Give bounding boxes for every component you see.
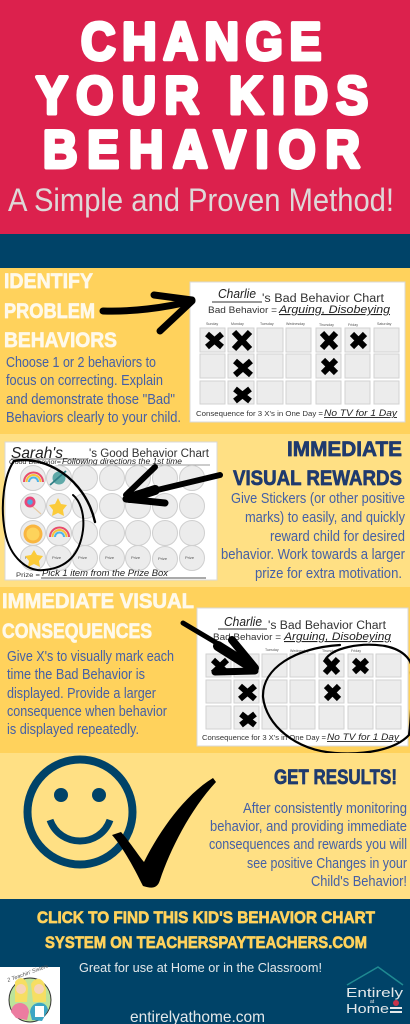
chart: Charlie's bad behavior chart: Consequence for 3 X's in One Day = [196, 409, 324, 418]
chart: Charlie's bad behavior chart: Tuesday [260, 322, 274, 326]
icon: star sticker [25, 550, 43, 567]
call to action heading: SYSTEM ON TEACHERSPAYTEACHERS.COM [45, 933, 367, 952]
navy divider band [0, 234, 410, 268]
chart: Charlie's bad behavior chart: 's Bad Behavior Chart [262, 293, 385, 305]
chart: Sarah's good behavior chart: Prize = [16, 572, 40, 579]
heading: immediate visual rewards [233, 438, 402, 490]
icon: smiley face [28, 760, 132, 864]
text block: identify description: Behaviors clearly to your child. [6, 410, 181, 426]
chart: Charlie's bad behavior chart: Wednesday [286, 322, 305, 326]
chart: Charlie's bad behavior chart, consequences: Bad Behavior = [213, 632, 281, 642]
text block: identify description: and demonstrate those "Bad" [6, 392, 175, 408]
chart: Charlie's bad behavior chart: Monday [231, 322, 244, 326]
chart: Charlie's bad behavior chart: Thursday [319, 323, 334, 327]
chart: Charlie's bad behavior chart: Sunday [206, 322, 218, 326]
chart: Charlie's bad behavior chart, consequences: No TV for 1 Day [327, 732, 400, 742]
chart: Charlie's bad behavior chart: Friday [348, 323, 358, 327]
chart: Sarah's good behavior chart [5, 442, 217, 580]
chart: Charlie's bad behavior chart: Saturday [377, 322, 392, 326]
icon: planet sticker [50, 471, 66, 485]
panel: immediate visual consequences [0, 587, 410, 753]
panel: immediate visual rewards [0, 434, 410, 587]
arrow: points to consequences [183, 623, 255, 672]
heading: immediate visual consequences [2, 590, 194, 643]
chart: Sarah's good behavior chart: Good Behavior= [9, 460, 62, 466]
chart: Charlie's bad behavior chart, consequences: Friday [351, 649, 361, 653]
chart: Sarah's good behavior chart: Prize [52, 555, 62, 560]
logo: Entirely at Home: Home [346, 1001, 389, 1016]
chart: Charlie's bad behavior chart, consequences [197, 608, 408, 746]
icon: star sticker [49, 498, 67, 516]
circle highlight around stickers [3, 460, 95, 570]
title: YOUR KIDS [36, 65, 368, 125]
heading: identify problem behaviors: PROBLEM [4, 300, 95, 323]
panel: footer [0, 899, 410, 1024]
heading: immediate visual consequences: CONSEQUENCES [2, 620, 152, 643]
chart: Sarah's good behavior chart: Prize [185, 555, 195, 560]
panel: identify problem behaviors [0, 268, 410, 434]
chart: Sarah's good behavior chart: Prize [78, 555, 88, 560]
text block: results description [209, 801, 407, 890]
chart: Sarah's good behavior chart: Prize [131, 555, 141, 560]
text block: consequences description: Give X's to visually mark each [7, 649, 174, 665]
chart: Charlie's bad behavior chart, consequences: Consequence for 3 X's in One Day = [202, 733, 327, 742]
call to action heading [37, 908, 376, 952]
text block: consequences description: is displayed repeatedly. [7, 722, 139, 738]
chart: Sarah's good behavior chart: 's Good Behavior Chart [89, 448, 210, 460]
icon: lollipop sticker [24, 496, 41, 514]
chart: Charlie's bad behavior chart: Bad Behavior = [208, 305, 277, 315]
chart: Charlie's bad behavior chart, consequences: Tuesday [265, 648, 279, 652]
heading: identify problem behaviors: IDENTIFY [4, 270, 93, 293]
text block: consequences description: time the Bad Behavior is [7, 667, 145, 683]
icon: check mark [112, 778, 216, 888]
logo: 2 Teachin' Sisters [0, 963, 60, 1024]
chart: Charlie's bad behavior chart: Arguing, Disobeying [278, 304, 391, 316]
chart: Charlie's bad behavior chart, consequences: Thursday [322, 649, 337, 653]
chart: Sarah's good behavior chart: Prize [105, 555, 115, 560]
text block: consequences description: displayed. Provide a larger [7, 686, 156, 702]
title: BEHAVIOR [43, 119, 360, 179]
text block: consequences description [7, 649, 174, 738]
chart: Charlie's bad behavior chart, consequences: Charlie [224, 615, 262, 629]
chart: Sarah's good behavior chart: Sarah's [11, 445, 63, 462]
heading: identify problem behaviors: BEHAVIORS [4, 329, 117, 352]
chart: Sarah's good behavior chart: Prize [158, 556, 168, 561]
text block: consequences description: consequence when behavior [7, 704, 167, 720]
chart: Sarah's good behavior chart: Pick 1 item from the Prize Box [42, 568, 169, 578]
logo: 2 Teachin' Sisters: 2 Teachin' Sisters [6, 963, 49, 984]
arrow: points to sticker chart [126, 467, 220, 503]
chart: Charlie's bad behavior chart, consequences: 's Bad Behavior Chart [268, 620, 387, 632]
logo: Entirely at Home: at [370, 999, 375, 1005]
chart: Charlie's bad behavior chart: Charlie [218, 287, 256, 301]
circle highlight around empty cells [263, 645, 410, 753]
text block: identify description: Choose 1 or 2 behaviors to [6, 355, 156, 371]
chart: Charlie's bad behavior chart, consequences: Wednesday [290, 649, 309, 653]
chart: Sarah's good behavior chart: Prize [25, 555, 35, 560]
arrow: points to bad behavior chart [103, 295, 192, 331]
icon: sun sticker [24, 524, 42, 544]
title: CHANGE [81, 11, 321, 71]
icon: rainbow sticker [50, 528, 69, 537]
text block: identify description: focus on correcting. Explain [6, 373, 163, 389]
heading: identify problem behaviors [4, 270, 117, 352]
call to action heading: CLICK TO FIND THIS KID'S BEHAVIOR CHART [37, 908, 376, 927]
logo: Entirely at Home: Entirely [346, 985, 404, 1000]
chart: Charlie's bad behavior chart [190, 282, 405, 422]
chart: Charlie's bad behavior chart, consequences: Arguing, Disobeying [283, 631, 392, 643]
chart: Charlie's bad behavior chart: No TV for 1 Day [324, 408, 398, 418]
text block: identify description [6, 355, 181, 426]
chart: Sarah's good behavior chart: Following directions the 1st time [62, 457, 183, 466]
panel: title banner [0, 0, 410, 234]
icon: rainbow sticker [24, 472, 43, 482]
heading: immediate visual rewards: IMMEDIATE [287, 438, 402, 461]
heading: immediate visual consequences: IMMEDIATE VISUAL [2, 590, 194, 613]
logo: Entirely at Home [346, 967, 404, 1016]
title [36, 11, 368, 179]
tagline: Great for use at Home or in the Classroom! [79, 960, 322, 975]
panel: get results [0, 753, 410, 899]
text block: rewards description [221, 491, 406, 582]
